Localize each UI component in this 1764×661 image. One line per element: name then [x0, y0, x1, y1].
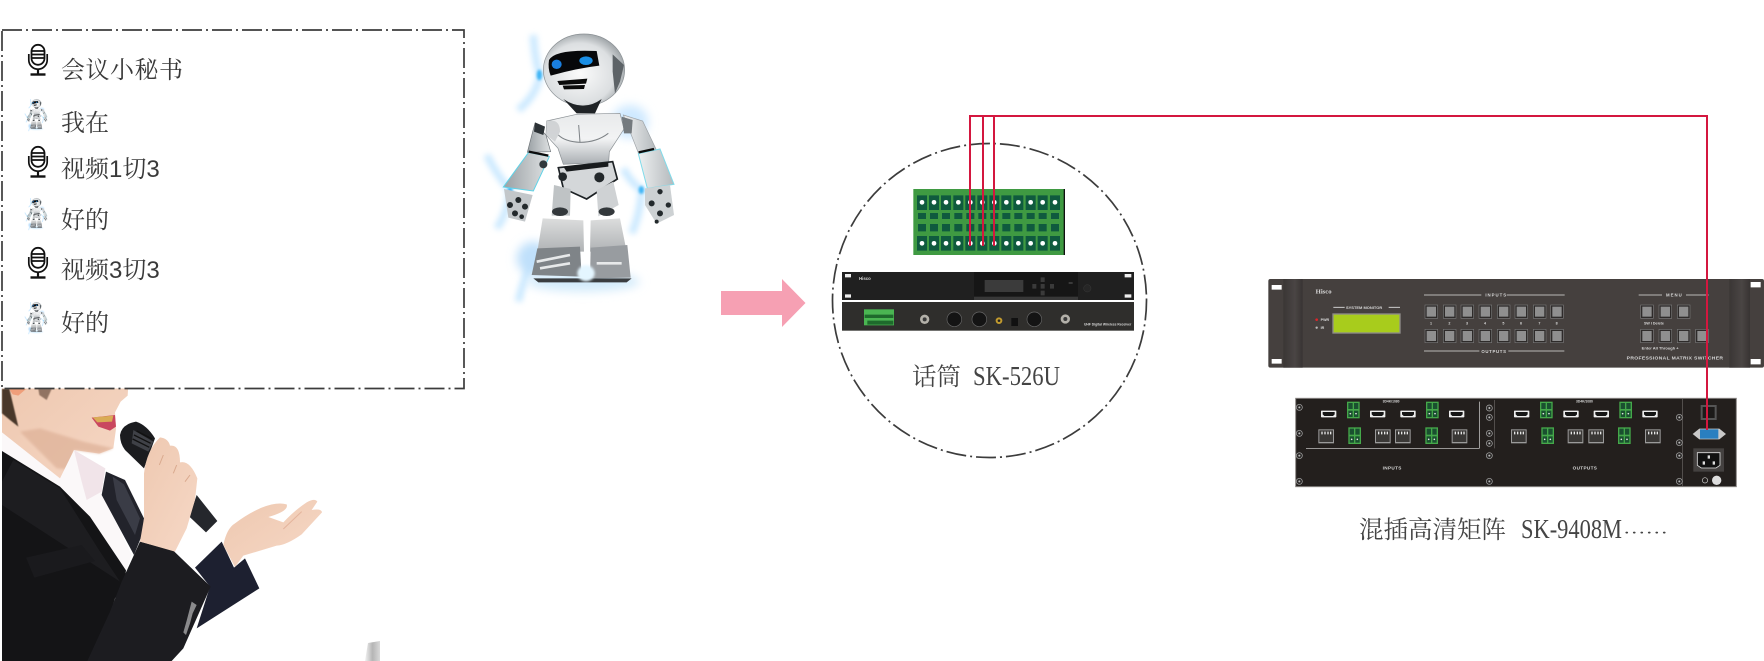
matrix front panel: 3 — [1466, 322, 1468, 326]
hair — [2, 389, 18, 427]
matrix front panel: OUTPUTS — [1481, 349, 1507, 354]
dialog panel — [2, 30, 464, 388]
output buttons — [1425, 329, 1438, 343]
matrix front panel: 5 — [1502, 322, 1504, 326]
matrix front panel: IR — [1321, 326, 1325, 330]
VGA port — [1693, 429, 1726, 439]
input buttons — [1425, 305, 1438, 319]
brand: Hisco — [1316, 288, 1332, 295]
matrix front panel: Enter All Through + — [1642, 345, 1679, 350]
right arm — [623, 115, 656, 154]
icon: robot 2 — [25, 198, 47, 230]
red signal wiring — [970, 116, 1707, 430]
matrix front panel: SW I Delete — [1644, 322, 1664, 326]
near sleeve — [87, 542, 211, 661]
receiver front panel: Hisco — [859, 276, 871, 281]
green terminal block — [913, 189, 1065, 255]
blue glow — [487, 35, 642, 302]
ear — [9, 389, 26, 396]
matrix front panel: PWR — [1321, 318, 1330, 322]
menu buttons — [1640, 305, 1654, 319]
top connector — [1701, 405, 1717, 420]
line: 我在: 我在 — [61, 110, 109, 137]
grey object at bottom — [365, 641, 380, 661]
matrix front panel: 6 — [1520, 322, 1522, 326]
caption: 话筒 SK-526U: SK-526U — [973, 361, 1060, 391]
matrix front panel: PROFESSIONAL MATRIX SWITCHER — [1627, 356, 1723, 362]
matrix front panel: 1 — [1430, 322, 1432, 326]
HDMI ports — [1321, 411, 1336, 417]
open hand — [223, 500, 322, 567]
head — [543, 34, 625, 106]
matrix rear panel — [1296, 398, 1736, 487]
left arm — [527, 123, 551, 152]
power socket — [1693, 448, 1724, 472]
caption: 混插高清矩阵 SK-9408M: 混插高清矩阵 — [1359, 517, 1506, 544]
LCD display — [1332, 313, 1401, 334]
visor — [549, 51, 599, 76]
icon: robot 1 — [25, 99, 47, 131]
screws and BNC — [1296, 404, 1302, 410]
rack ears — [1283, 279, 1303, 368]
large robot illustration — [487, 34, 674, 302]
matrix rear panel: 3D4K/1080 — [1383, 400, 1400, 404]
receiver rear panel — [842, 302, 1134, 331]
legs and boots — [537, 218, 584, 252]
line: 会议小秘书: 会议小秘书 — [61, 57, 183, 84]
microphone head — [120, 422, 155, 468]
caption: 话筒 SK-526U: 话筒 — [912, 364, 961, 391]
panel labels: INPUTS — [1485, 293, 1507, 298]
product circle — [832, 144, 1146, 458]
far lapel — [102, 472, 144, 555]
matrix front panel: 2 — [1448, 322, 1450, 326]
line: 视频1切3: 视频1切3 — [61, 156, 160, 183]
woman speaking into microphone — [2, 385, 322, 661]
matrix front panel: MENU — [1666, 293, 1683, 298]
matrix rear panel: OUTPUTS — [1573, 465, 1597, 470]
matrix rear panel: 3D4K/1080 — [1576, 400, 1593, 404]
torso — [546, 113, 624, 164]
line: 好的 again: 好的 — [61, 310, 109, 337]
foot light — [577, 265, 595, 281]
caption: 混插高清矩阵 SK-9408M: SK-9408M — [1521, 514, 1622, 544]
matrix front panel: 7 — [1538, 322, 1540, 326]
matrix front panel: 4 — [1484, 322, 1487, 326]
far sleeve — [195, 542, 259, 628]
icon: microphone 1 — [29, 45, 47, 74]
matrix front panel: 8 — [1556, 322, 1558, 326]
line: 好的: 好的 — [61, 207, 109, 234]
dashed dialog border — [2, 30, 464, 388]
green connectors — [1347, 402, 1360, 418]
hand on microphone — [140, 437, 197, 552]
jacket body — [2, 451, 126, 661]
matrix front panel — [1268, 279, 1764, 368]
thighs — [552, 185, 571, 216]
arrow — [721, 279, 806, 327]
white shirt — [2, 432, 132, 570]
icon: microphone 2 — [29, 147, 47, 176]
pelvis — [558, 162, 617, 199]
matrix front panel: SYSTEM MONITOR — [1346, 305, 1382, 310]
icon: microphone 3 — [29, 248, 47, 278]
RJ45 ports — [1318, 429, 1334, 443]
icon: robot 3 — [25, 302, 47, 334]
microphone handle — [189, 495, 217, 532]
face and neck — [2, 385, 128, 495]
line: 视频3切3: 视频3切3 — [61, 257, 160, 284]
dashed circle — [832, 144, 1146, 458]
caption: 混插高清矩阵 SK-9408M: ······ — [1623, 525, 1668, 542]
receiver rear panel: UHF Digital Wireless Receiver — [1084, 323, 1132, 327]
rear labels: INPUTS — [1383, 465, 1402, 470]
receiver front panel — [842, 272, 1134, 300]
mouth — [92, 415, 116, 431]
